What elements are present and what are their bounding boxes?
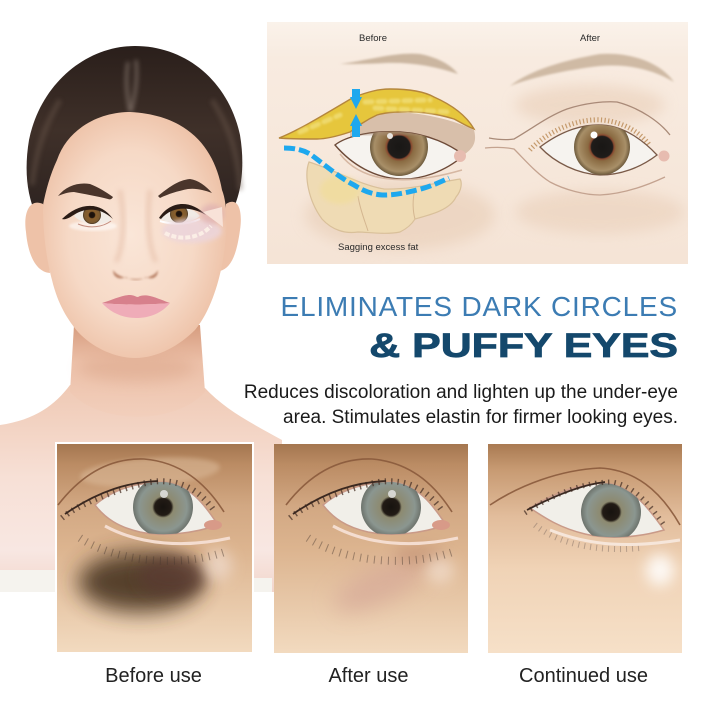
sagging fat pad: [307, 162, 461, 233]
ears: [25, 202, 241, 273]
eyebrows: [58, 179, 212, 199]
body text: Reduces discoloration and lighten up the under-eye: [244, 382, 678, 403]
eyebrow: after: [510, 54, 674, 86]
heading: puffy eyes: & PUFFY EYES: [369, 327, 678, 365]
upper eyelid fat: [279, 89, 474, 139]
diagram labels: Before: [359, 33, 387, 44]
diagram labels: Sagging excess fat: [338, 242, 419, 253]
photo: before use: [57, 444, 252, 652]
photo: after use: [274, 444, 468, 653]
diagram labels: [338, 33, 600, 253]
nose: [113, 190, 158, 280]
eyebrow: before: [340, 54, 458, 74]
body text: area. Stimulates elastin for firmer looking eyes.: [283, 407, 678, 428]
label: before use: Before use: [105, 665, 202, 687]
lips: [102, 295, 170, 318]
face: [43, 112, 226, 358]
label: continued use: Continued use: [519, 665, 648, 687]
dashed lines and arrows: [284, 89, 449, 195]
white border of first photo: [55, 442, 254, 654]
eye: after: [485, 102, 670, 195]
eye: left: [62, 206, 117, 231]
photo: continued use: [488, 444, 682, 653]
eye: before: [334, 131, 466, 180]
under-eye highlight and arrow: [162, 204, 224, 243]
upper lid skin: [350, 112, 475, 155]
shoulders: [0, 325, 282, 592]
heading: eliminates dark circles: ELIMINATES DARK CIRCLES: [280, 291, 678, 322]
eye: right: [159, 204, 206, 224]
hair: [27, 46, 242, 215]
label: after use: After use: [328, 665, 409, 687]
diagram labels: After: [580, 33, 600, 44]
body text: [244, 382, 678, 428]
panel: before and after eye diagram: [267, 22, 688, 264]
